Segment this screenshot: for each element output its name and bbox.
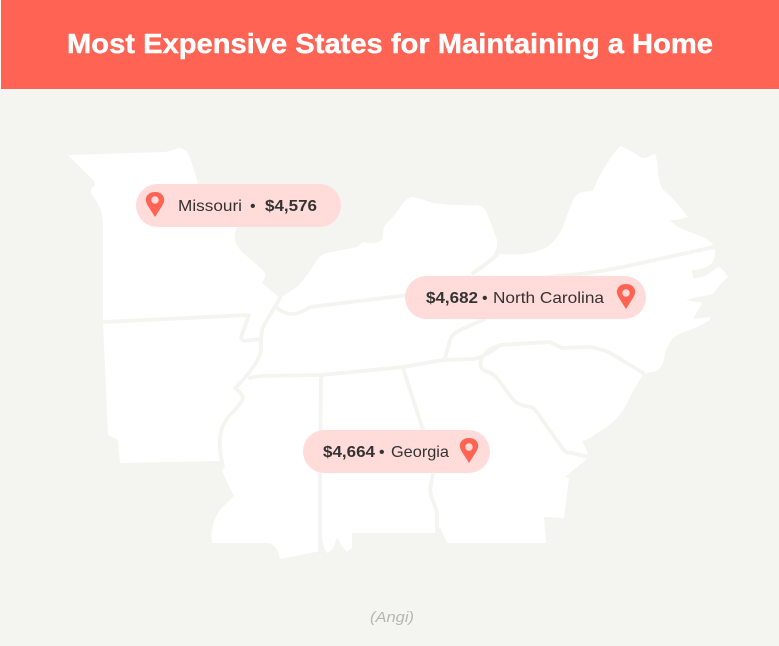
callout: Georgia [303,430,490,473]
label: Missouri value: • [250,198,256,215]
label: Georgia value: Georgia [391,444,449,461]
label: Georgia value: • [379,444,385,461]
label: Georgia value: $4,664 [323,444,375,461]
title: Most Expensive States for Maintaining a Home [67,28,713,59]
map silhouette [68,146,728,559]
source note: (Angi) [370,609,414,626]
icon: map pin [460,438,478,463]
label: Missouri value: $4,576 [265,198,317,215]
label: North Carolina value: • [482,290,488,307]
callout: North Carolina [405,276,646,319]
state borders [103,247,714,551]
label: North Carolina value: North Carolina [493,290,604,307]
label: North Carolina value: $4,682 [426,290,478,307]
callout: Missouri [136,184,341,227]
header banner [1,0,779,89]
map of southeastern states [68,146,728,559]
icon: map pin [617,284,635,309]
icon: map pin [146,192,164,217]
label: Missouri value: Missouri [178,198,242,215]
